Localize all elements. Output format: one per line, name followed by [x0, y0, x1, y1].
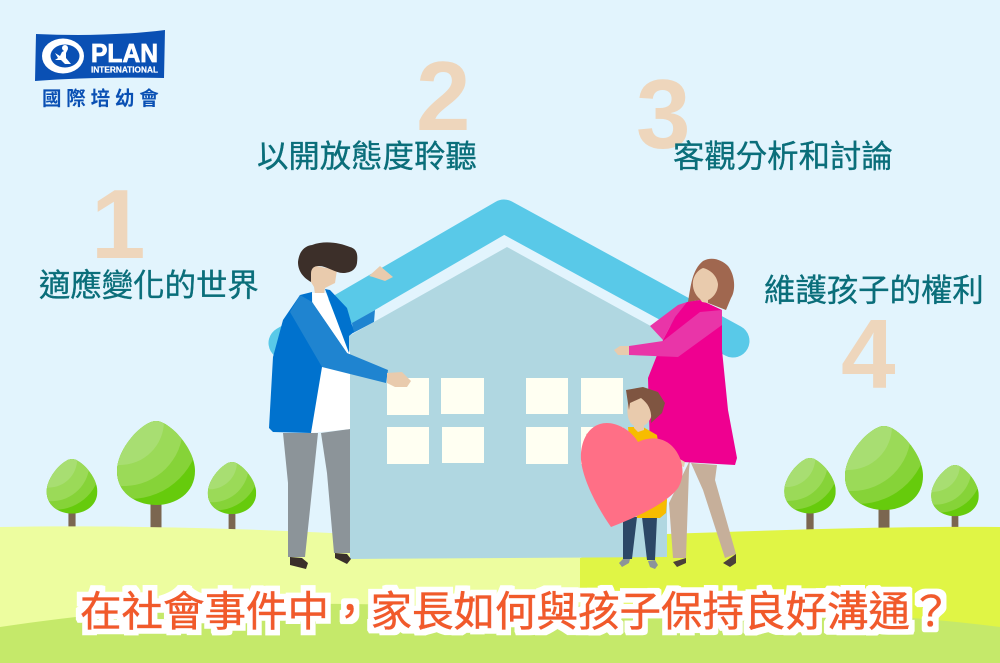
man: shoes — [290, 553, 351, 569]
logo Chinese name: 國際培幼會 — [42, 87, 164, 110]
man: jacket — [269, 292, 347, 433]
woman: legs — [669, 460, 736, 558]
man: face and neck — [311, 265, 337, 294]
woman: front sleeve — [629, 310, 722, 357]
logo emblem — [42, 38, 84, 74]
tree right large — [782, 364, 928, 540]
man: back sleeve — [352, 310, 375, 333]
man figure — [269, 242, 411, 569]
tree right small — [743, 417, 839, 533]
man: hand on window — [387, 372, 411, 387]
ground: left light hill — [0, 526, 580, 663]
logo: Plan International — [35, 30, 165, 110]
house windows — [387, 378, 623, 464]
child: hair — [626, 387, 665, 423]
step number 2: 2 — [416, 41, 471, 151]
step label 3: 客觀分析和討論 — [673, 139, 893, 174]
logo flag — [35, 30, 165, 81]
step label 2: 以開放態度聆聽 — [257, 139, 477, 174]
woman: back sleeve — [650, 302, 687, 340]
heart — [581, 423, 683, 527]
house roof — [285, 216, 733, 343]
title: 在社會事件中，家長如何與孩子保持良好溝通？ — [80, 588, 952, 635]
step number 3: 3 — [636, 59, 691, 169]
logo wordmark INTERNATIONAL: INTERNATIONAL — [91, 66, 158, 74]
tree left small — [6, 419, 101, 533]
ground: right yellow hill — [580, 527, 1000, 663]
man: shirt — [311, 293, 350, 433]
woman figure — [614, 259, 737, 567]
man: trousers — [283, 429, 350, 557]
tree left large — [54, 359, 200, 535]
woman: dress — [648, 300, 737, 465]
child: shirt — [628, 427, 667, 518]
step label 1: 適應變化的世界 — [39, 268, 259, 303]
man: hand on roof — [369, 266, 393, 281]
ground: front green hill — [0, 604, 1000, 663]
logo wordmark PLAN: PLAN — [91, 38, 158, 68]
woman: face and neck — [693, 268, 718, 303]
man: front sleeve — [290, 295, 388, 383]
woman: hand — [614, 346, 629, 355]
tree right third — [893, 427, 982, 535]
woman: hair — [688, 259, 734, 310]
house body — [349, 247, 667, 559]
child: trousers — [623, 517, 657, 560]
step number 4: 4 — [841, 299, 896, 409]
child: shoes — [619, 559, 658, 569]
tree left third — [169, 424, 259, 533]
step label 4: 維護孩子的權利 — [764, 273, 984, 308]
child: hands — [586, 431, 685, 467]
child: neck and face — [627, 397, 652, 432]
step number 1: 1 — [91, 169, 146, 279]
man: jacket lapel — [325, 289, 354, 353]
man: hair — [298, 242, 357, 282]
child figure — [581, 387, 685, 569]
woman: shoes — [673, 554, 736, 567]
